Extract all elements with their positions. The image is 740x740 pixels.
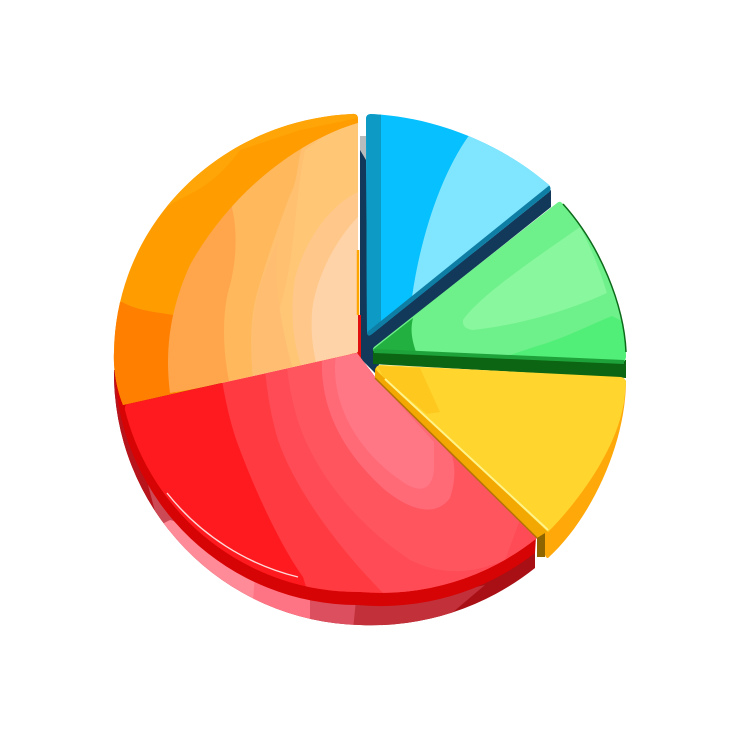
slice: red lower side wall: [114, 370, 535, 626]
highlight: red rim: [167, 493, 298, 577]
highlight: yellow edge: [385, 379, 548, 530]
slice: orange: [114, 114, 360, 405]
pie chart illustration: [114, 114, 627, 626]
slice: red: [124, 353, 537, 593]
slice: yellow rim: [545, 380, 626, 558]
shade: yellow corner: [378, 366, 440, 414]
edge: brown shadow beside red: [375, 378, 537, 538]
edge: green lower bevel: [374, 351, 624, 362]
slice: amber edge: [375, 368, 548, 538]
highlight: orange right edge: [357, 250, 359, 315]
connector: dark core behind the slices: [360, 136, 385, 374]
slice: red band: [115, 375, 537, 606]
slice: green side wall: [373, 350, 626, 378]
slice: yellow: [376, 365, 626, 532]
edge: blue lower bevel: [367, 189, 552, 338]
connector: red sliver: [350, 315, 361, 358]
edge: green arc shadow: [563, 204, 626, 352]
slice: blue side wall: [366, 190, 551, 348]
slice: green: [372, 202, 627, 364]
slice: gold side wall: [537, 533, 545, 557]
connector: grey highlight strip: [360, 136, 366, 160]
slice: blue: [366, 114, 550, 336]
